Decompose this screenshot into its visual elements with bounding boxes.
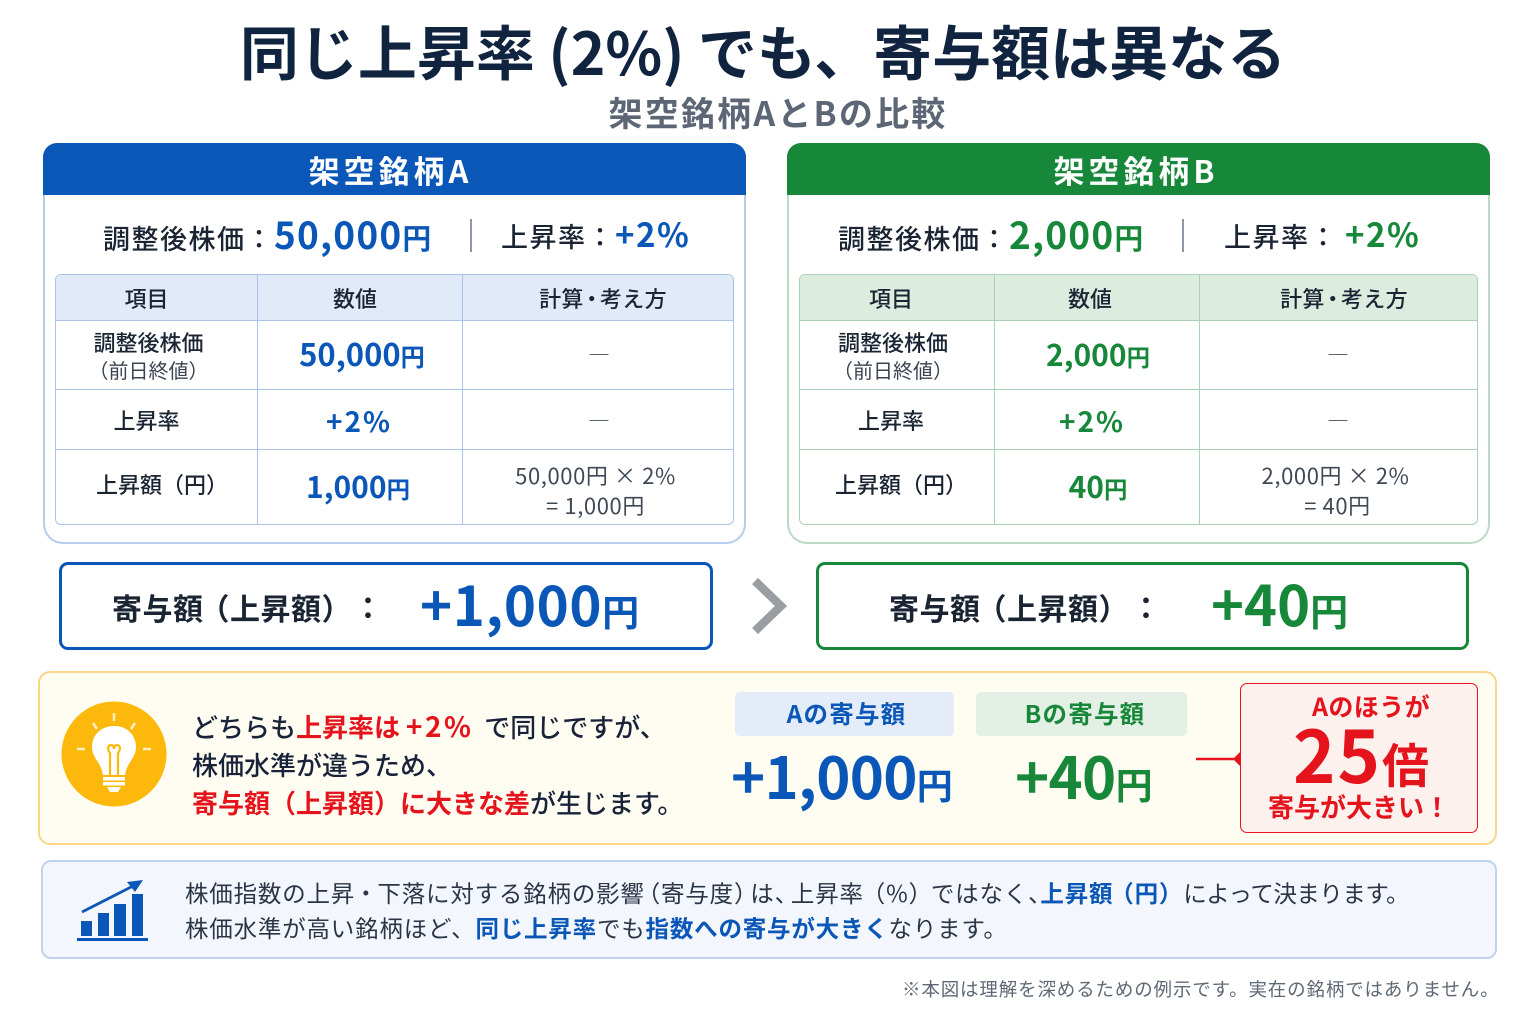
panel A table: （前日終値） (88, 355, 208, 384)
label: A contribution (735, 692, 954, 736)
callout: 25 times: 25倍 (1293, 699, 1431, 804)
table B row: price: 調整後株価 (838, 326, 948, 358)
panel A table: 1,000円 (306, 463, 410, 507)
panel A table: ― (588, 338, 610, 370)
panel B table: 数値 (1068, 282, 1112, 314)
contribution B value: +40円 (1211, 562, 1348, 643)
panel B table: ― (1327, 404, 1349, 436)
subtitle: 架空銘柄AとBの比較 (609, 87, 947, 136)
label: A contribution: Aの寄与額 (787, 696, 906, 731)
panel B table (799, 274, 1478, 525)
explanation text: 株価指数の上昇・下落に対する銘柄の影響（寄与度）は、上昇率（%）ではなく、上昇額（円）によって決まります。 (185, 875, 1409, 909)
panel A header (43, 143, 746, 195)
panel: insight (38, 671, 1497, 845)
panel A summary: rise rate: 上昇率：+2% (501, 209, 690, 257)
table A row: price: 調整後株価 (93, 326, 204, 358)
explanation text: 株価水準が高い銘柄ほど、同じ上昇率でも指数への寄与が大きくなります。 (185, 910, 1008, 944)
value: B contribution: +40円 (1015, 732, 1152, 816)
panel B table: 40円 (1069, 463, 1127, 507)
panel B table: （前日終値） (833, 355, 953, 384)
table A header row (56, 275, 733, 321)
contribution box A (59, 562, 713, 650)
panel A table: 50,000円 × 2% (515, 459, 676, 491)
panel A table: 数値 (333, 282, 377, 314)
table B row: rise rate: 上昇率 (858, 404, 924, 436)
insight text: どちらも上昇率は +2% で同じですが、 (192, 706, 666, 746)
icon: light bulb (62, 702, 166, 806)
insight text: 寄与額（上昇額）に大きな差が生じます。 (192, 784, 683, 821)
panel A table: +2% (326, 401, 392, 441)
value: A contribution: +1,000円 (731, 732, 952, 816)
panel: stock B (787, 143, 1490, 544)
panel B table: = 40円 (1304, 489, 1371, 521)
callout: 25 times: Aのほうが (1312, 688, 1430, 724)
callout: 25 times: 寄与が大きい！ (1268, 788, 1450, 825)
contribution A value: +1,000円 (420, 563, 640, 642)
contribution B label: 寄与額（上昇額） (889, 585, 1129, 629)
icon: rising bar chart (77, 880, 148, 941)
panel B summary: adjusted price: 調整後株価：2,000円 (838, 206, 1144, 260)
panel B table: ― (1327, 338, 1349, 370)
panel A table: 項目 (124, 282, 168, 314)
panel A table: 50,000円 (299, 330, 425, 375)
table B row: rise amount: 上昇額（円） (835, 468, 967, 500)
panel A table: = 1,000円 (546, 489, 645, 521)
panel B header (787, 143, 1490, 195)
insight text: 株価水準が違うため、 (192, 746, 452, 783)
insight text (192, 706, 683, 821)
contribution A label: ： (353, 584, 384, 628)
table B header row (800, 275, 1477, 321)
contribution B label: ： (1131, 584, 1162, 628)
explanation text (185, 875, 1409, 944)
panel B table: 2,000円 × 2% (1262, 459, 1409, 491)
label: B contribution: Bの寄与額 (1025, 696, 1145, 731)
contribution box B (816, 562, 1469, 650)
panel A header: 架空銘柄A (309, 147, 472, 192)
table A row: rise amount: 上昇額（円） (96, 468, 228, 500)
label: B contribution (976, 692, 1187, 736)
footnote: ※本図は理解を深めるための例示です。実在の銘柄ではありません。 (902, 976, 1499, 1002)
panel A table: ― (588, 404, 610, 436)
panel B table: 項目 (869, 282, 913, 314)
contribution A label: 寄与額（上昇額） (112, 585, 352, 629)
panel B table: +2% (1059, 401, 1125, 441)
title: 同じ上昇率 (2%) でも、寄与額は異なる (240, 7, 1286, 92)
panel A summary: adjusted price: 調整後株価：50,000円 (103, 206, 432, 260)
panel A table: 計算・考え方 (539, 282, 667, 314)
table A row: rise rate: 上昇率 (113, 404, 180, 436)
callout: 25 times (1240, 683, 1478, 833)
arrow: greater than (752, 578, 787, 634)
panel B header: 架空銘柄B (1053, 147, 1219, 192)
panel: stock A (43, 143, 746, 544)
panel B table: 2,000円 (1046, 331, 1150, 375)
panel B table: 計算・考え方 (1280, 282, 1408, 314)
connector line (1196, 752, 1240, 766)
panel: explanation (41, 860, 1497, 959)
panel B summary: rise rate: 上昇率：+2% (1224, 209, 1420, 257)
panel A table (55, 274, 734, 525)
